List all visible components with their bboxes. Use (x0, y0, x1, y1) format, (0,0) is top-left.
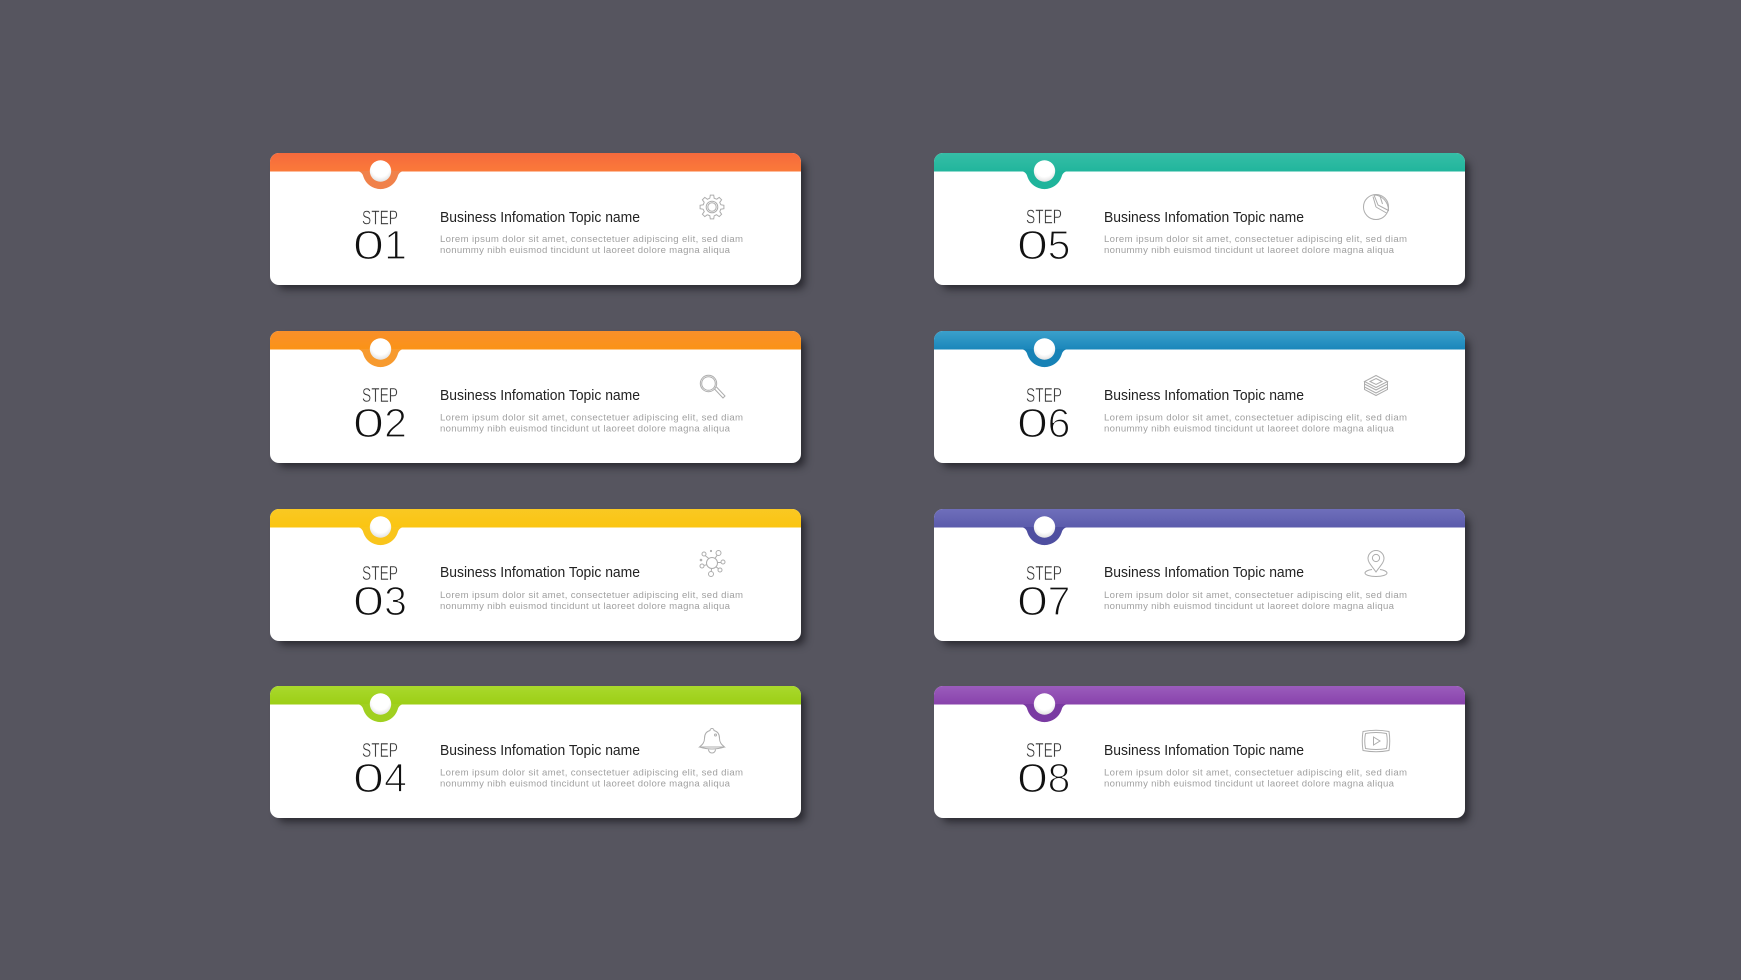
step label: STEP (1026, 740, 1062, 762)
description text: Lorem ipsum dolor sit amet, consectetuer adipiscing elit, sed diam (1104, 234, 1406, 245)
description text: Lorem ipsum dolor sit amet, consectetuer adipiscing elit, sed diam (440, 234, 743, 245)
header bar with notch and dot (934, 331, 1465, 368)
step number (1016, 400, 1070, 446)
description text: nonummy nibh euismod tincidunt ut laoreet dolore magna aliqua (440, 778, 731, 790)
header bar with notch and dot (934, 153, 1465, 190)
description text: nonummy nibh euismod tincidunt ut laoreet dolore magna aliqua (1104, 600, 1394, 612)
description text (1104, 586, 1414, 612)
step number (1016, 222, 1070, 268)
icon: map pin (1360, 548, 1390, 578)
topic title: Business Infomation Topic name (1104, 565, 1304, 581)
description text: Lorem ipsum dolor sit amet, consectetuer adipiscing elit, sed diam (1104, 768, 1406, 778)
panel: step 06 (934, 331, 1464, 463)
description text: nonummy nibh euismod tincidunt ut laoreet dolore magna aliqua (440, 600, 731, 612)
step number (988, 762, 1098, 794)
step number: 0 (353, 578, 384, 624)
step number: 2 (384, 400, 407, 446)
step number: 0 (1016, 400, 1048, 446)
step number: 0 (1016, 222, 1048, 268)
step number (353, 755, 407, 801)
step number: 8 (1048, 755, 1070, 801)
header bar with notch and dot (270, 331, 801, 368)
step label: STEP (1026, 385, 1062, 407)
step number (353, 222, 407, 268)
description text: nonummy nibh euismod tincidunt ut laoreet dolore magna aliqua (1104, 424, 1394, 434)
description text (1104, 764, 1414, 790)
header bar with notch and dot (270, 509, 801, 546)
step number: 5 (1048, 222, 1070, 268)
panel: step 08 (934, 686, 1464, 818)
step label: STEP (362, 740, 398, 762)
header bar with notch and dot (934, 686, 1464, 724)
step number: 3 (384, 578, 407, 624)
step number (353, 578, 407, 624)
description text (440, 590, 743, 612)
step number: 1 (384, 222, 407, 268)
topic title: Business Infomation Topic name (1104, 742, 1304, 758)
icon: gear (700, 194, 724, 220)
step number: 0 (353, 755, 384, 801)
description text (440, 412, 743, 434)
step label: STEP (362, 208, 398, 230)
step number: 6 (1048, 400, 1070, 446)
step number (353, 400, 407, 446)
panel: step 07 (934, 508, 1464, 640)
description text: nonummy nibh euismod tincidunt ut laoreet dolore magna aliqua (1104, 245, 1394, 256)
topic title: Business Infomation Topic name (440, 742, 640, 758)
step number (1016, 578, 1070, 624)
step number: 4 (384, 755, 407, 801)
icon: bell (698, 728, 726, 754)
description text (440, 234, 743, 256)
panel: step 04 (270, 686, 801, 818)
header bar with notch and dot (934, 509, 1465, 546)
description text: nonummy nibh euismod tincidunt ut laoreet dolore magna aliqua (440, 245, 731, 256)
icon: network (700, 550, 726, 577)
icon: magnifier (700, 374, 726, 399)
step label: STEP (1026, 562, 1062, 584)
description text: Lorem ipsum dolor sit amet, consectetuer adipiscing elit, sed diam (1104, 590, 1406, 600)
panel: step 03 (270, 508, 801, 640)
description text: Lorem ipsum dolor sit amet, consectetuer adipiscing elit, sed diam (440, 412, 743, 424)
description text (1104, 412, 1406, 434)
step label: STEP (362, 562, 398, 584)
icon: pie chart (1363, 194, 1389, 220)
description text: Lorem ipsum dolor sit amet, consectetuer adipiscing elit, sed diam (440, 768, 743, 778)
step label: STEP (1026, 206, 1062, 228)
topic title: Business Infomation Topic name (440, 565, 640, 581)
step label: STEP (362, 385, 398, 407)
topic title: Business Infomation Topic name (1104, 388, 1304, 404)
panel: step 02 (270, 331, 801, 463)
description text: Lorem ipsum dolor sit amet, consectetuer adipiscing elit, sed diam (1104, 412, 1406, 424)
step number: 0 (1016, 578, 1048, 624)
header bar with notch and dot (270, 153, 801, 190)
icon: video player (1360, 725, 1390, 755)
panel: step 05 (934, 153, 1464, 285)
description text: nonummy nibh euismod tincidunt ut laoreet dolore magna aliqua (1104, 778, 1394, 790)
description text (1104, 234, 1406, 256)
topic title: Business Infomation Topic name (440, 210, 640, 226)
description text: nonummy nibh euismod tincidunt ut laoreet dolore magna aliqua (440, 424, 731, 434)
description text: Lorem ipsum dolor sit amet, consectetuer adipiscing elit, sed diam (440, 590, 743, 600)
step number: 7 (1048, 578, 1070, 624)
topic title: Business Infomation Topic name (1104, 210, 1304, 226)
panel: step 01 (270, 153, 801, 285)
description text (440, 768, 743, 790)
step number: 0 (353, 400, 384, 446)
topic title: Business Infomation Topic name (440, 388, 640, 404)
step number: 0 (1016, 755, 1048, 801)
icon: stacked layers (1364, 375, 1388, 396)
header bar with notch and dot (270, 686, 801, 722)
step number: 0 (353, 222, 384, 268)
